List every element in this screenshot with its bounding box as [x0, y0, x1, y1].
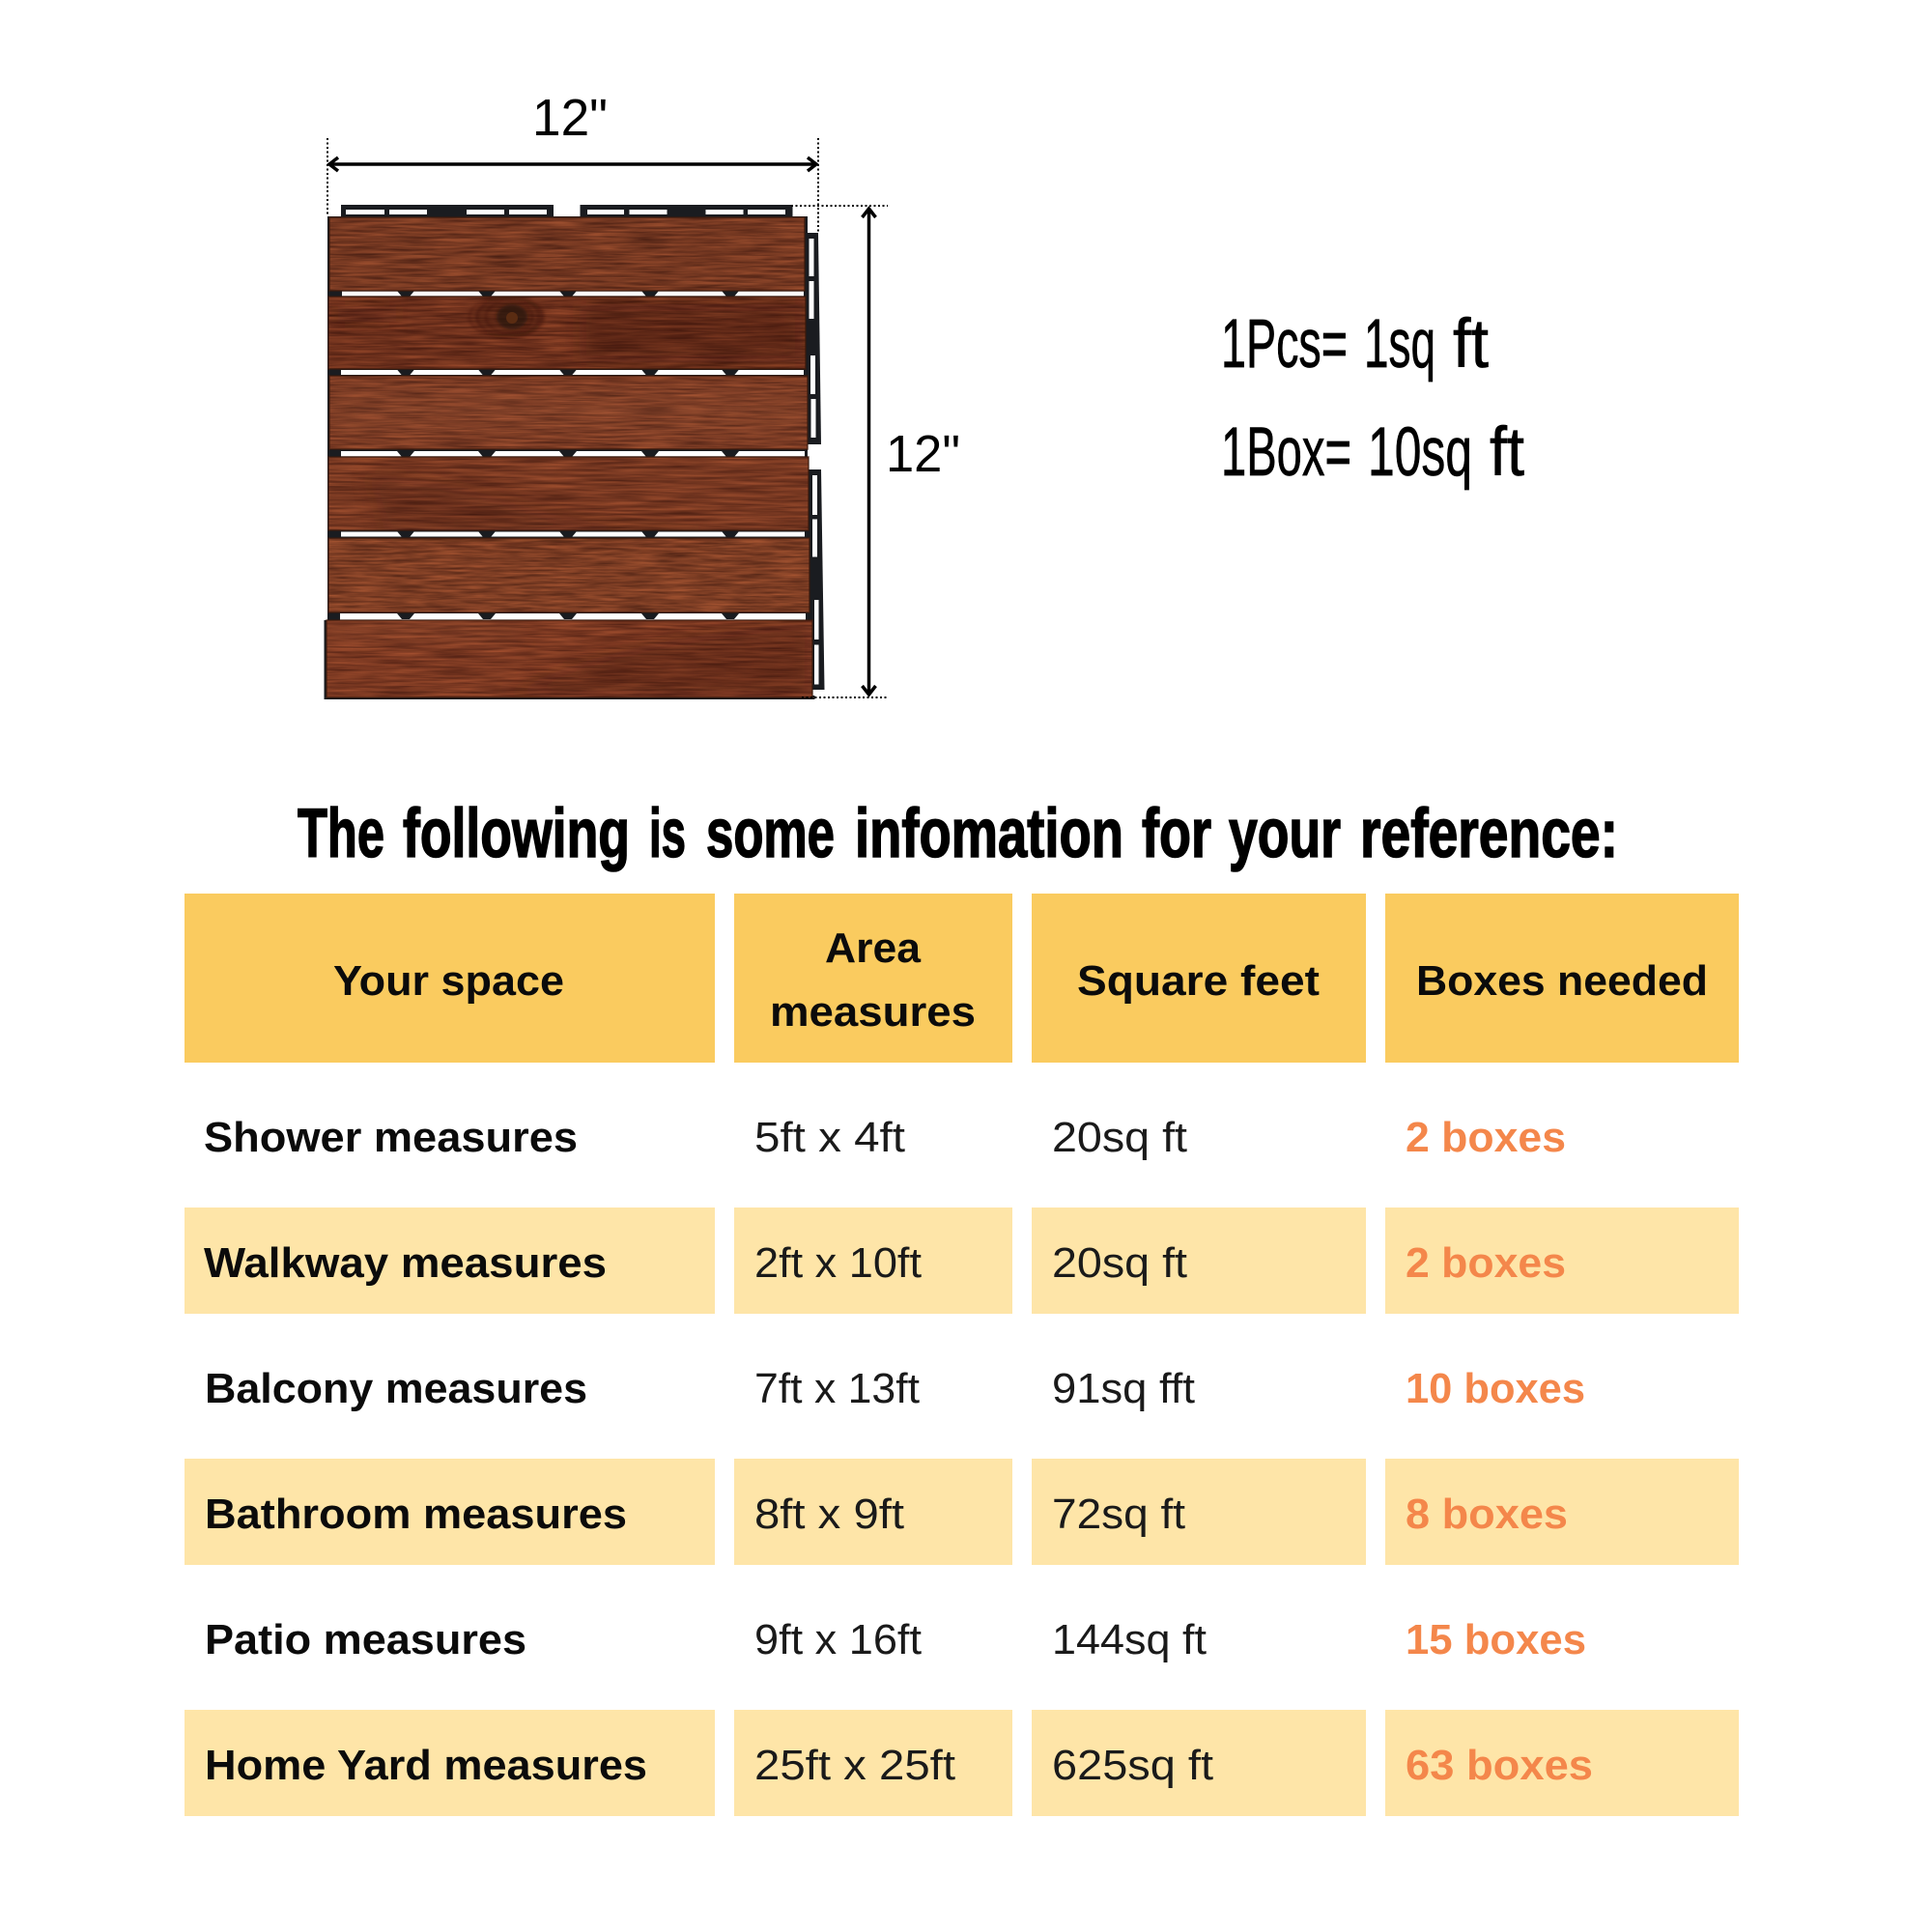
row: bathroom: 8ft x 9ft: [754, 1491, 904, 1538]
black plastic base: [325, 205, 825, 699]
width label: 12": [532, 89, 608, 147]
row: shower: 5ft x 4ft: [754, 1114, 905, 1161]
coverage note: [1221, 306, 1524, 491]
row: home yard: 625sq ft: [1052, 1742, 1213, 1789]
row: walkway: [185, 1208, 1739, 1314]
header: area measures: [734, 894, 1012, 1063]
row: balcony: Balcony measures: [205, 1365, 587, 1412]
box coverage: [1221, 414, 1524, 491]
title: following: [403, 796, 630, 872]
title: for: [1142, 796, 1211, 872]
row: home yard: 25ft x 25ft: [754, 1742, 955, 1789]
row: balcony: 91sq fft: [1052, 1365, 1195, 1412]
box coverage: 10sq: [1368, 414, 1472, 491]
title: is: [649, 796, 686, 872]
title: your: [1229, 796, 1341, 872]
height dimension: [791, 206, 960, 697]
deck tile photo: [325, 205, 825, 699]
header: area measures: Area: [825, 924, 922, 972]
row: home yard: 63 boxes: [1406, 1742, 1593, 1789]
plank edge shadows: [327, 217, 812, 697]
row: patio: [205, 1616, 1586, 1663]
row: patio: 9ft x 16ft: [754, 1616, 922, 1663]
row: balcony: [205, 1365, 1585, 1412]
row: walkway: Walkway measures: [204, 1239, 607, 1287]
top clip slots: [346, 210, 785, 214]
row: shower: 20sq ft: [1052, 1114, 1187, 1161]
width arrow: [329, 157, 816, 171]
row: home yard: Home Yard measures: [205, 1742, 647, 1789]
wood knot: [469, 297, 544, 337]
dotted extension lines: [327, 138, 818, 233]
title: infomation: [855, 796, 1123, 872]
row: patio: Patio measures: [205, 1616, 526, 1663]
piece coverage: ft: [1453, 306, 1489, 383]
row: bathroom: [185, 1459, 1739, 1565]
box coverage: ft: [1490, 414, 1524, 491]
wood tone shading: [328, 304, 811, 697]
title: reference:: [1360, 796, 1618, 872]
right clip slots: [810, 239, 819, 684]
row: walkway: 2 boxes: [1406, 1239, 1566, 1287]
header: boxes needed: [1385, 894, 1739, 1063]
row: bathroom: Bathroom measures: [205, 1491, 627, 1538]
piece coverage: 1sq: [1364, 306, 1435, 383]
row: walkway: 20sq ft: [1052, 1239, 1187, 1287]
row: balcony: 7ft x 13ft: [754, 1365, 920, 1412]
header: your space: Your space: [333, 957, 564, 1005]
row: balcony: 10 boxes: [1406, 1365, 1585, 1412]
box coverage: 1Box=: [1221, 414, 1351, 491]
height label: 12": [886, 425, 960, 483]
header: your space: [185, 894, 715, 1063]
row: bathroom: 72sq ft: [1052, 1491, 1185, 1538]
table: [185, 894, 1739, 1816]
title: The: [298, 796, 384, 872]
width dimension: [327, 89, 818, 233]
header: square feet: Square feet: [1077, 957, 1320, 1005]
row: walkway: 2ft x 10ft: [754, 1239, 922, 1287]
row: patio: 15 boxes: [1406, 1616, 1586, 1663]
header: square feet: [1032, 894, 1366, 1063]
wood planks: [327, 217, 812, 697]
header: area measures: measures: [770, 988, 976, 1036]
row: shower: [204, 1114, 1566, 1161]
row: shower: Shower measures: [204, 1114, 578, 1161]
dotted height extension lines: [791, 206, 888, 697]
title: some: [706, 796, 835, 872]
gaps between planks: [340, 291, 806, 620]
piece coverage: 1Pcs=: [1221, 306, 1348, 383]
row: shower: 2 boxes: [1406, 1114, 1566, 1161]
row: home yard: [185, 1710, 1739, 1816]
height arrow: [862, 209, 875, 695]
table header: [185, 894, 1739, 1063]
row: patio: 144sq ft: [1052, 1616, 1207, 1663]
row: bathroom: 8 boxes: [1406, 1491, 1568, 1538]
header: boxes needed: Boxes needed: [1416, 957, 1708, 1005]
title: [298, 796, 1618, 872]
